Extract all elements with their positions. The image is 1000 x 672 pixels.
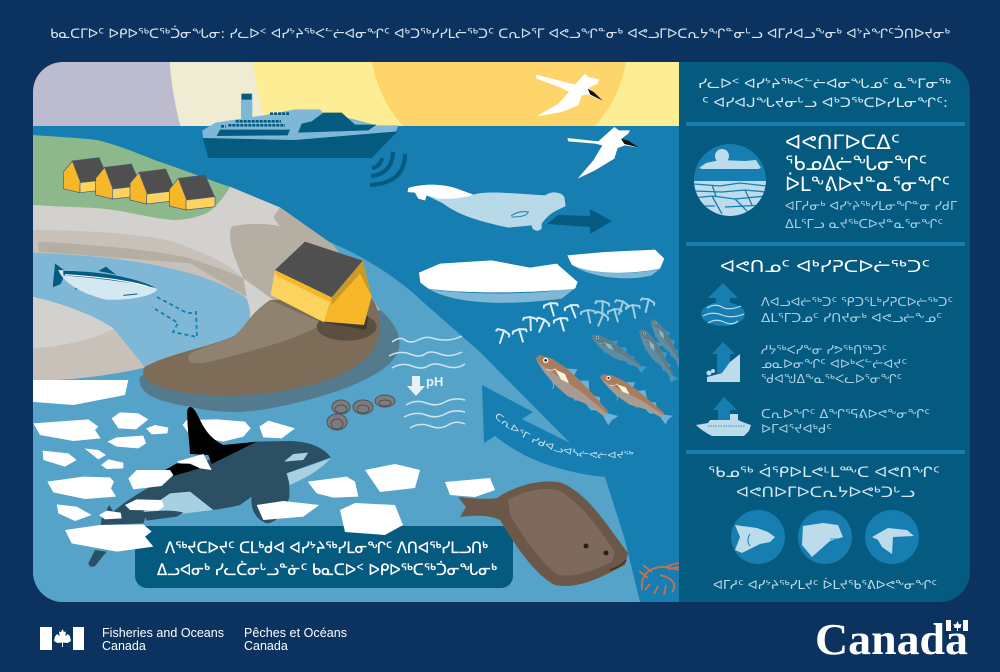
icon: shipping bbox=[696, 397, 751, 436]
bird: tern lower bbox=[567, 127, 639, 179]
heading: drivers: ᐊᕙᑎᓄᑦ ᐊᒃᓯᕈᑕᐅᓖᖅᑐᑦ bbox=[720, 257, 930, 277]
text: erosion: ᓱᔭᖅᐸᓯᖕᓂ ᓯᕗᖅᑎᖅᑐᑦ bbox=[761, 342, 887, 357]
arrow: beluga direction bbox=[547, 209, 612, 234]
icon: beluga head bbox=[798, 510, 852, 564]
caption text: ᐱᖅᔪᑕᐅᔪᑦ ᑕᒪᒃᑯᐊ ᐊᓯᔾᔨᖅᓯᒪᓂᖏᑦ ᐱᑎᐊᖅᓯᒪᓗᑎᒃ bbox=[165, 539, 488, 557]
text: habitat detail: ᐃᒪᕐᒥᓗ ᓇᔪᖅᑕᐅᔪᓐᓇᕐᓂᖏᑦ bbox=[785, 216, 943, 231]
arrow: salmon dashed path bbox=[152, 297, 197, 337]
heading: habitat bbox=[785, 130, 950, 196]
clams bbox=[327, 395, 395, 430]
organisation name: French: Canada bbox=[244, 639, 288, 653]
ice floes: foreground bbox=[65, 464, 495, 552]
icon: sea ice bbox=[694, 144, 766, 217]
icon: rising water bbox=[701, 283, 745, 326]
heading: species adaptation bbox=[708, 464, 940, 501]
ship bbox=[202, 94, 398, 158]
icon: bird bbox=[865, 510, 919, 564]
krill swarm bbox=[492, 297, 655, 345]
text: habitat detail bbox=[785, 198, 957, 231]
green hill bbox=[33, 135, 230, 220]
heading: habitat: ᖃᓄᐃᓖᖓᓂᖏᑦ bbox=[785, 151, 927, 175]
text: rising water: ᐱᐊᓗᐊᓖᖅᑐᑦ ᕿᑐᕐᒪᒃᓯᕈᑕᐅᓖᖅᑐᑦ bbox=[761, 294, 953, 309]
shallow water bbox=[33, 240, 640, 602]
organisation name: English: Canada bbox=[102, 639, 146, 653]
sonar waves bbox=[370, 152, 405, 185]
heading: habitat: ᐊᕙᑎᒥᐅᑕᐃᑦ bbox=[785, 130, 900, 154]
text: shipping: ᑕᕆᐅᖏᑦ ᐃᖏᕐᕋᕕᐅᕙᖕᓂᖏᑦ bbox=[761, 406, 930, 421]
logo: Canada wordmark: Canada bbox=[815, 615, 968, 664]
pH waves and arrow bbox=[389, 336, 465, 428]
text: shipping bbox=[761, 406, 930, 436]
orca bbox=[88, 407, 331, 567]
pH label: pH bbox=[426, 374, 443, 389]
text: shipping: ᐅᒥᐊᕐᔪᐊᒃᑯᑦ bbox=[761, 421, 832, 436]
fish school bbox=[536, 319, 679, 426]
land and river bbox=[30, 187, 399, 412]
organisation name: French bbox=[244, 626, 347, 653]
heading: species adaptation: ᖃᓄᖅ ᐋᕿᐅᒪᕙᒻᒪᖖᑕ ᐊᕙᑎᖏᑦ bbox=[708, 464, 940, 481]
ice floes: open water bbox=[419, 250, 664, 303]
fish: salmon bbox=[53, 263, 157, 300]
divider bbox=[686, 122, 965, 126]
icon: salmon head bbox=[731, 510, 785, 564]
organisation name: French: Pêches et Océans bbox=[244, 626, 347, 640]
pH label bbox=[407, 376, 442, 396]
sky bbox=[33, 62, 679, 126]
text: species: ᐊᒥᓱᑦ ᐊᓯᔾᔨᖅᓯᒪᔪᑦ ᐆᒪᔪᖃᕐᕕᐅᕙᖕᓂᖏᑦ bbox=[713, 576, 937, 592]
ocean bbox=[33, 126, 679, 602]
heading: habitat: ᐆᒪᖕᕕᐅᔪᓐᓇᕐᓂᖏᑦ bbox=[785, 172, 950, 196]
bird: tern upper bbox=[536, 74, 603, 116]
organisation name: English bbox=[102, 626, 224, 653]
caption text bbox=[157, 539, 497, 579]
text: erosion: ᓄᓇᐅᓂᖏᑦ ᐊᐅᒃᐸᓪᓖᐊᔪᑦ bbox=[761, 356, 907, 371]
panel: ecosystem scene bbox=[33, 62, 679, 602]
text: rising water: ᐃᒪᕐᒥᑐᓄᑦ ᓯᑎᔪᓂᒃ ᐊᕙᓗᓖᖕᓄᑦ bbox=[761, 310, 942, 325]
caption box bbox=[135, 526, 513, 588]
text: habitat detail: ᐊᒥᓱᓂᒃ ᐊᓯᔾᔨᖅᓯᒪᓂᖏᓐᓂ ᓯᑯᒥ bbox=[785, 198, 957, 213]
house: eroding shore bbox=[271, 242, 377, 341]
panel intro text: ᓯᓚᐅᑉ ᐊᓯᔾᔨᖅᐸᓪᓖᐊᓂᖓᓄᑦ ᓇᖕᒥᓂᖅ bbox=[698, 76, 951, 92]
divider bbox=[686, 450, 965, 454]
caption text: ᐃᓗᐊᓂᒃ ᓯᓚᑖᓂᒡᓗᓐᓃᑦ ᑲᓇᑕᐅᑉ ᐅᑭᐅᖅᑕᖅᑑᓂᖓᓂᒃ bbox=[157, 561, 497, 579]
beluga bbox=[408, 185, 566, 231]
icon: erosion bbox=[706, 342, 740, 382]
panel: right impacts bbox=[679, 62, 970, 602]
logo: flag signature bbox=[40, 627, 84, 650]
flounder bbox=[458, 481, 628, 586]
text: rising water bbox=[761, 294, 953, 325]
organisation name: English: Fisheries and Oceans bbox=[102, 626, 224, 640]
title: ᑲᓇᑕᒥᐅᑦ ᐅᑭᐅᖅᑕᖅᑑᓂᖓᓂ: ᓯᓚᐅᑉ ᐊᓯᔾᔨᖅᐸᓪᓖᐊᓂᖏᑦ ᐊᒃᑐᖅᓯᓯᒪᓖᖅᑐᑦ ᑕᕆᐅᕐᒥ ᐊᕙᓗᖏᓐᓂᒃ ᐊᕙᓗᒥᐅᑕᕆᔭᖏᓐᓂᒡᓗ ᐊᒥᓱᐊᓗᖕᓂᒃ ᐊᔾᔨᖏᑦᑑᑎᐅᔪᓂᒃ bbox=[50, 25, 950, 42]
houses: village bbox=[63, 158, 215, 210]
text: erosion bbox=[761, 342, 907, 386]
arrow label: ᑕᕆᐅᕐᒥ ᓯᑯᐊᓗᐊᓴᓖᕙᓖᐊᔪᖅ bbox=[496, 414, 634, 458]
shrimp bbox=[638, 562, 679, 596]
panel intro text: ᑦ ᐊᓯᐊᒍᖓᔪᓂᒡᓗ ᐊᒃᑐᖅᑕᐅᓯᒪᓂᖏᑦ: bbox=[702, 95, 948, 111]
arrow: current bbox=[482, 385, 605, 477]
heading: species adaptation: ᐊᕙᑎᐅᒥᐅᑕᕆᔭᐅᕙᒃᑐᒡᓗ bbox=[736, 485, 915, 501]
divider bbox=[686, 242, 965, 246]
panel intro text bbox=[698, 76, 951, 111]
ice floes: behind orca bbox=[30, 380, 295, 521]
text: erosion: ᖁᐊᖑᐃᖕᓇᖅᐸᓚᐅᕐᓂᖏᑦ bbox=[761, 371, 902, 386]
